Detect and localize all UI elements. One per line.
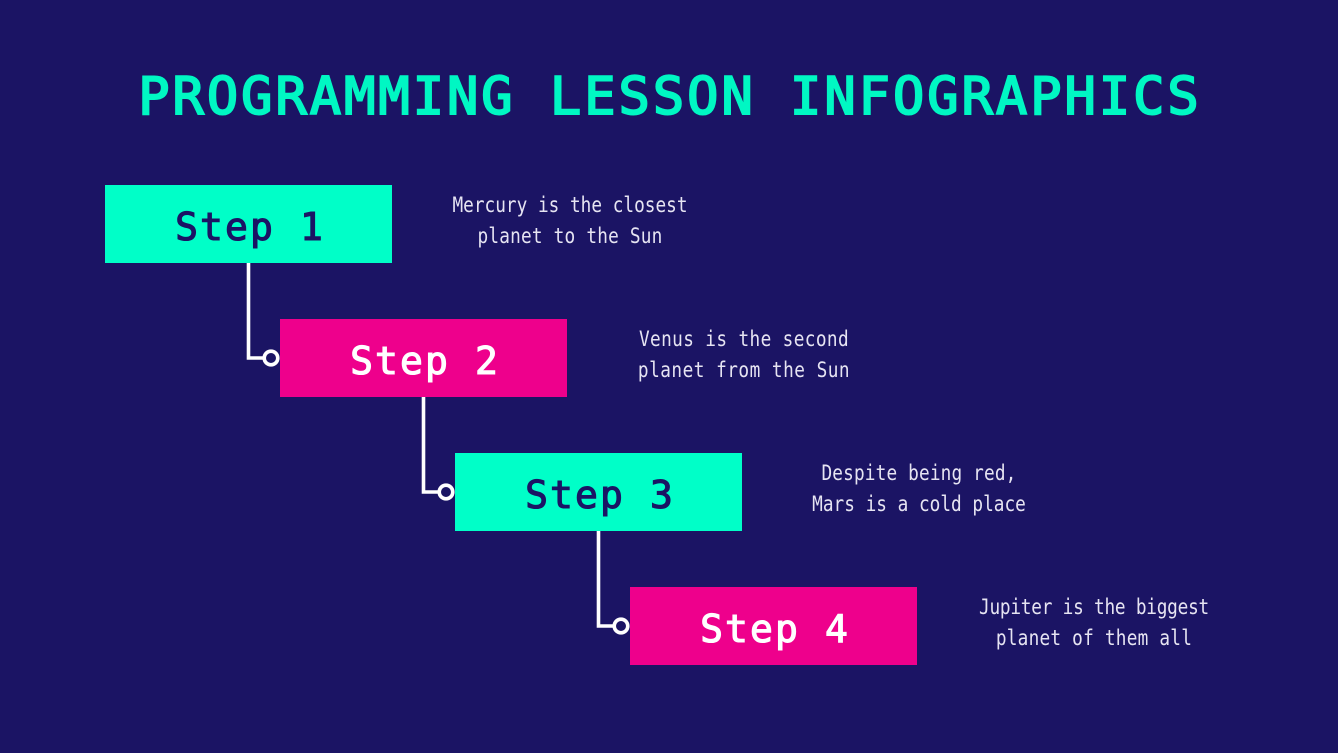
step 1 box (105, 185, 392, 262)
step 2 description (638, 327, 850, 382)
step 4 description (979, 595, 1209, 650)
step 3 description (812, 461, 1026, 516)
connector 1 to 2 (248, 263, 278, 365)
step 3 description: Mars is a cold place (812, 492, 1026, 516)
step 3 description: Despite being red, (821, 461, 1017, 485)
step 2 description: planet from the Sun (638, 358, 850, 382)
step 4 description: Jupiter is the biggest (979, 595, 1209, 619)
step 1 description (452, 193, 688, 248)
title: PROGRAMMING LESSON INFOGRAPHICS (138, 67, 1202, 127)
step 2 box: Step 2 (350, 339, 500, 383)
step 1 box: Step 1 (175, 205, 325, 249)
step 1 description: planet to the Sun (477, 224, 663, 248)
step 4 box (630, 587, 916, 664)
step 1 description: Mercury is the closest (452, 193, 688, 217)
step 2 box (280, 319, 566, 396)
step 4 description: planet of them all (996, 626, 1192, 650)
connector 2 to 3 (424, 397, 453, 499)
step 3 box: Step 3 (525, 473, 675, 517)
step 4 box: Step 4 (700, 607, 850, 651)
connector 3 to 4 (598, 531, 628, 633)
step 2 description: Venus is the second (639, 327, 849, 351)
step 3 box (455, 453, 742, 530)
